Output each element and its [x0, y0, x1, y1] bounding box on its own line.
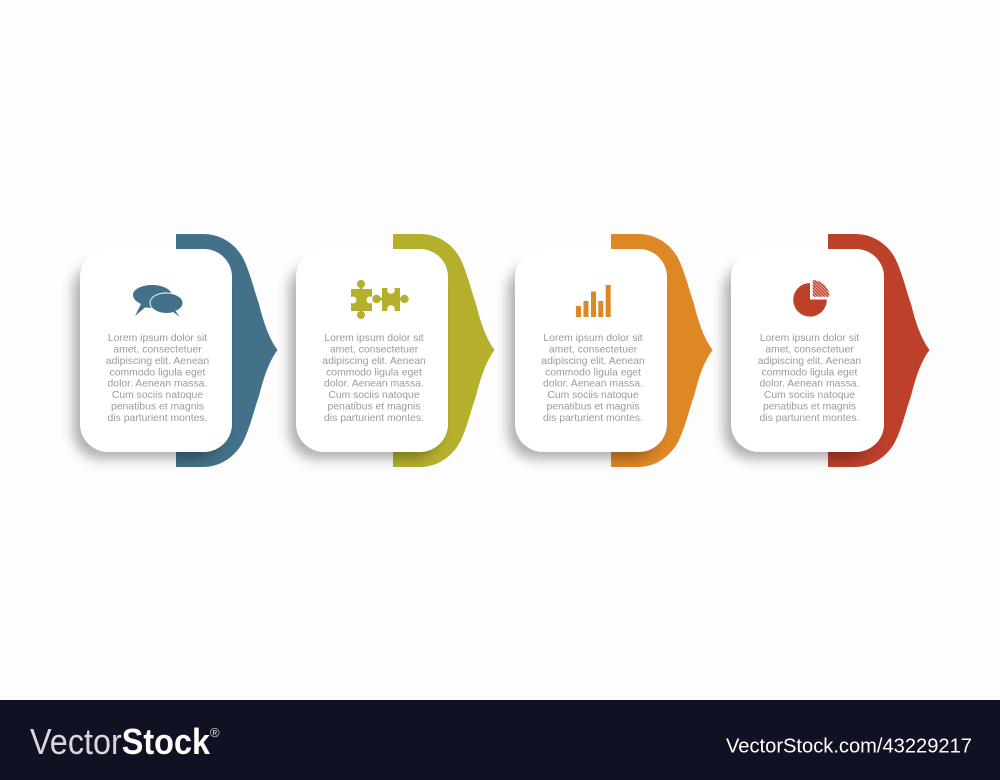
card: [296, 249, 448, 452]
card: [731, 249, 884, 452]
text block: commodo ligula eget: [110, 367, 206, 378]
text block: Lorem ipsum dolor sit: [108, 333, 207, 344]
logo: registered mark: ®: [210, 725, 220, 740]
text block: dolor. Aenean massa.: [324, 379, 424, 390]
text block: dis parturient montes.: [108, 413, 207, 424]
text block: dis parturient montes.: [324, 413, 424, 424]
panel: step 4: [724, 234, 930, 467]
text block: penatibus et magnis: [328, 402, 420, 412]
panel: step 2: [289, 234, 494, 467]
text block: commodo ligula eget: [326, 367, 422, 378]
text block: amet, consectetuer: [113, 344, 202, 355]
arrow band: olive: [393, 234, 494, 467]
text block: commodo ligula eget: [762, 367, 858, 378]
footer bar: [0, 700, 1000, 780]
card shadow: [289, 263, 439, 459]
icon: speech bubbles: [133, 285, 183, 319]
text block: adipiscing elit. Aenean: [106, 356, 209, 367]
text block: amet, consectetuer: [330, 344, 419, 355]
text block: penatibus et magnis: [546, 402, 640, 412]
image id: VectorStock.com/43229217: [726, 736, 972, 758]
text block: Cum sociis natoque: [328, 390, 420, 401]
text block: adipiscing elit. Aenean: [541, 356, 645, 367]
text block: Lorem ipsum dolor sit: [760, 333, 859, 344]
text block: dis parturient montes.: [760, 413, 859, 424]
text block: adipiscing elit. Aenean: [322, 356, 426, 367]
text block: Cum sociis natoque: [764, 390, 855, 401]
card shadow: [508, 263, 658, 459]
text block: Lorem ipsum dolor sit: [324, 333, 424, 344]
text block: dolor. Aenean massa.: [760, 379, 859, 390]
text block: amet, consectetuer: [549, 344, 638, 355]
card shadow: [724, 263, 874, 459]
text block: Cum sociis natoque: [112, 390, 203, 401]
text block: dolor. Aenean massa.: [108, 379, 207, 390]
text block: dis parturient montes.: [543, 413, 643, 424]
text block: Lorem ipsum dolor sit: [543, 333, 643, 344]
arrow band: red: [828, 234, 930, 467]
text block: dolor. Aenean massa.: [543, 379, 643, 390]
card: [515, 249, 667, 452]
text block: penatibus et magnis: [763, 402, 856, 412]
icon: puzzle pieces: [350, 280, 409, 319]
card: [80, 249, 232, 452]
arrow band: orange: [611, 234, 712, 467]
logo: VectorStock: VectorStock: [30, 721, 211, 762]
arrow band: blue: [176, 234, 278, 467]
text block: adipiscing elit. Aenean: [758, 356, 861, 367]
text block: penatibus et magnis: [111, 402, 204, 412]
card shadow: [73, 263, 223, 459]
panel: step 3: [508, 234, 712, 467]
text block: amet, consectetuer: [765, 344, 854, 355]
text block: commodo ligula eget: [545, 367, 641, 378]
icon: pie chart: [793, 280, 829, 317]
text block: Cum sociis natoque: [547, 390, 639, 401]
icon: bar chart: [576, 285, 611, 317]
panel: step 1: [73, 234, 278, 467]
